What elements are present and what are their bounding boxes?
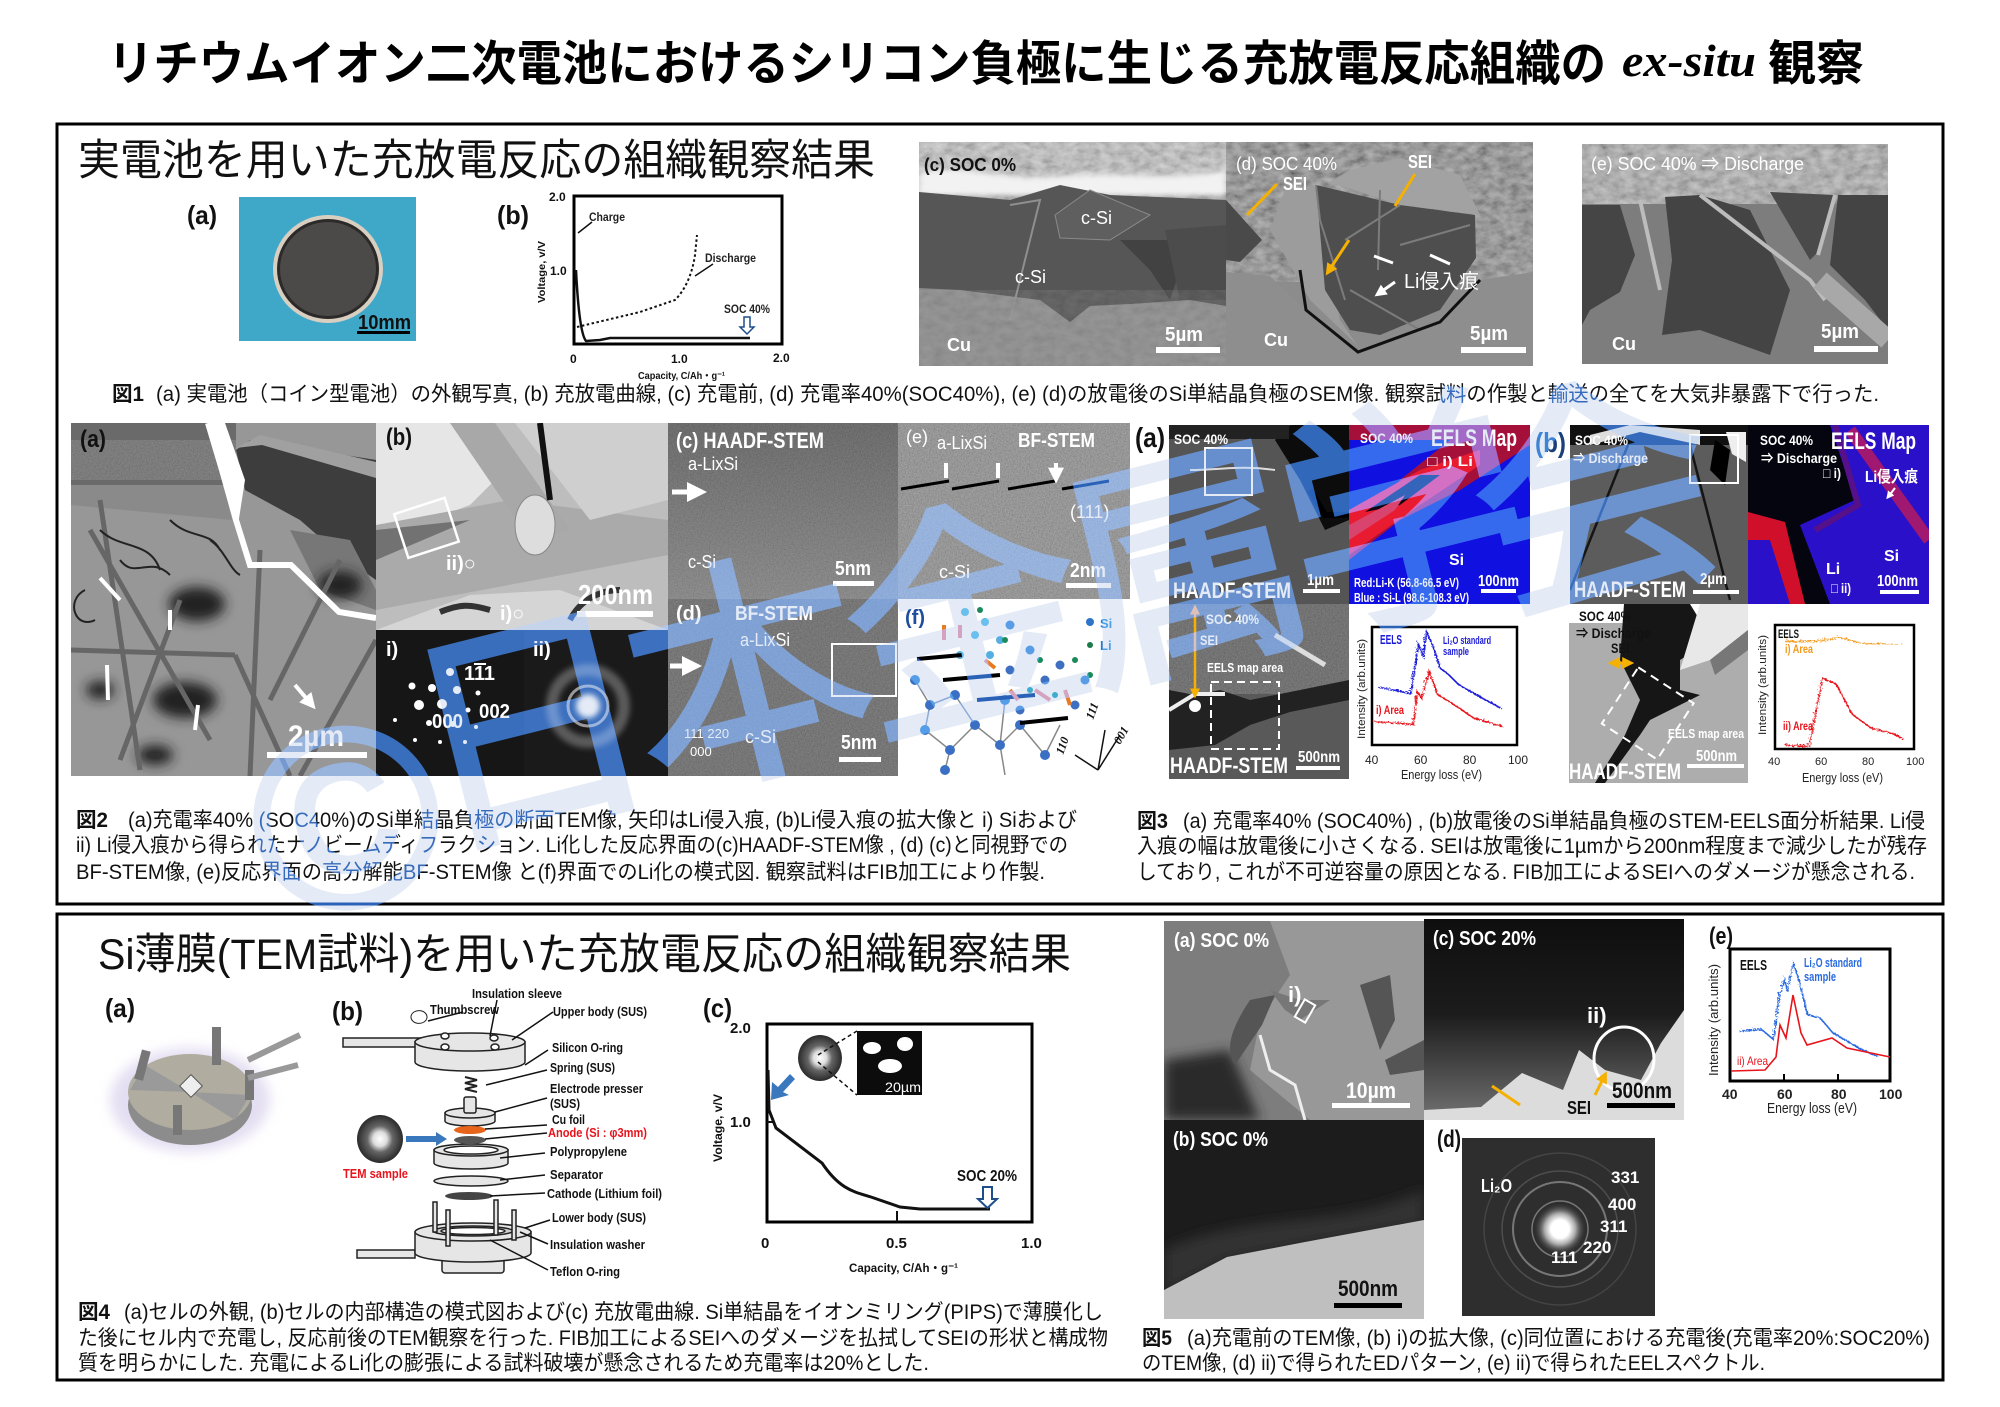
chart: EELS a [1356, 627, 1528, 782]
schematic: cell internal structure: Insulation sleeve [472, 987, 562, 1001]
schematic: cell internal structure: Polypropylene [550, 1145, 627, 1159]
watermark: pale tint: © [220, 658, 472, 980]
caption: figure 5 [1142, 1327, 1930, 1375]
schematic: f lattice model [905, 607, 1132, 775]
schematic: cell internal structure: Electrode presser [550, 1082, 643, 1096]
SEM image: c SOC 0%: Cu [947, 335, 971, 355]
watermark: pale tint: 日 [382, 573, 679, 891]
schematic: cell internal structure: Teflon O-ring [550, 1265, 620, 1279]
STEM image: fig3 a bottom: SEI [1200, 632, 1218, 648]
STEM image: e lattice: BF-STEM [1018, 430, 1095, 452]
EELS map: a: Si [1449, 552, 1464, 569]
schematic: cell internal structure: Silicon O-ring [552, 1041, 623, 1055]
schematic: cell internal structure: Thumbscrew [430, 1003, 499, 1017]
chart: thin-film curve: Capacity, C/Ah・g⁻¹ [849, 1261, 958, 1275]
SEM image: e SOC 40% discharge: Cu [1612, 334, 1636, 354]
chart: charge-discharge curve: 1.0 [550, 264, 567, 278]
TEM image: fig5 c: 500nm [1612, 1078, 1672, 1103]
diffraction: Li2O rings: 331 [1611, 1168, 1639, 1187]
caption: figure 4: た後にセル内で充電し, 反応前後のTEM観察を行った. FIB加工によるSEIへのダメージを払拭してSEIの形状と構成物 [78, 1327, 1108, 1350]
heading: thin film: Si薄膜(TEM試料)を用いた充放電反応の組織観察結果 [98, 931, 1071, 979]
chart: EELS fig5 [1706, 949, 1903, 1117]
STEM image: fig3 b top: HAADF-STEM [1574, 577, 1686, 602]
STEM image: c HAADF: a-LixSi [688, 454, 738, 474]
EELS map: b: Si [1884, 548, 1899, 565]
SEM image: d SOC 40%: SEI [1283, 174, 1307, 194]
chart: charge-discharge curve: Charge [589, 210, 625, 224]
STEM image: fig3 b top: 2µm [1700, 571, 1727, 588]
TEM image: fig2 a [71, 423, 376, 776]
label: fig5 e: (e) [1709, 923, 1733, 950]
watermark: pale tint: 属 [1037, 410, 1334, 728]
watermark: copyright: 日 [382, 573, 679, 891]
EELS map: a: Blue : Si-L (98.6-108.3 eV) [1354, 590, 1469, 605]
TEM image: fig5 b: (b) SOC 0% [1173, 1129, 1268, 1151]
chart: EELS fig5: 80 [1831, 1086, 1847, 1102]
STEM image: e lattice: c-Si [939, 562, 970, 582]
schematic: cell internal structure: Cu foil [552, 1113, 585, 1127]
SEM image: c SOC 0%: (c) SOC 0% [924, 155, 1016, 175]
SEM image: c SOC 0%: c-Si [1081, 208, 1112, 228]
caption: figure 2: 図2 [76, 809, 108, 832]
EELS map: b [1748, 425, 1929, 604]
chart: thin-film curve: 1.0 [1021, 1235, 1042, 1252]
TEM image: fig5 c: ii) [1587, 1003, 1607, 1028]
EELS map: a: Red:Li-K (56.8-66.5 eV) [1354, 575, 1459, 590]
schematic: cell internal structure: Separator [550, 1168, 603, 1182]
chart: EELS b [1757, 625, 1924, 785]
chart: thin-film curve: Voltage, v/V [711, 1094, 725, 1162]
TEM image: fig2 b [376, 423, 668, 630]
diffraction: ii [524, 630, 668, 776]
EELS map: a: SOC 40% [1360, 430, 1413, 446]
SEM image: d SOC 40%: SEI [1408, 152, 1432, 172]
title: リチウムイオン二次電池におけるシリコン負極に生じる充放電反応組織の [108, 38, 1606, 91]
TEM image: fig5 a: (a) SOC 0% [1174, 930, 1269, 952]
title: 観察 [1768, 38, 1864, 91]
STEM image: fig3 b top [1570, 425, 1748, 604]
SEM image: e SOC 40% discharge: 5µm [1821, 321, 1859, 343]
STEM image: c HAADF: (c) HAADF-STEM [676, 428, 824, 453]
TEM image: fig2 a: (a) [80, 426, 106, 453]
EELS map: b: Li [1826, 561, 1840, 578]
STEM image: fig3 a top: HAADF-STEM [1173, 578, 1291, 603]
schematic: cell internal structure: Spring (SUS) [550, 1061, 615, 1075]
SEM image: d SOC 40%: Cu [1264, 330, 1288, 350]
STEM image: d BF: 000 [690, 744, 712, 759]
STEM image: fig3 a top: SOC 40% [1174, 431, 1228, 447]
STEM image: e lattice [898, 423, 1130, 599]
title: ex-situ [1622, 35, 1756, 86]
STEM image: e lattice: 2nm [1070, 560, 1106, 582]
STEM image: fig3 a bottom: HAADF-STEM [1170, 753, 1288, 778]
chart: thin-film curve: 2.0 [730, 1020, 751, 1037]
SEM image: c SOC 0%: 5µm [1165, 324, 1203, 346]
caption: figure 3: 図3 [1137, 810, 1168, 833]
chart: charge-discharge curve: 0 [570, 352, 577, 366]
chart: EELS a: 40 [1365, 753, 1379, 767]
schematic: f lattice model: 110 [1053, 735, 1072, 756]
watermark: pale tint: 本 [600, 518, 898, 837]
schematic: f lattice model: 111 [1083, 701, 1102, 721]
TEM image: fig2 b: i)○ [500, 603, 524, 625]
caption: figure 3: しており, これが不可逆容量の原因となる. FIB加工によるSEIへのダメージが懸念される. [1137, 861, 1915, 884]
watermark: pale tint: 金 [818, 464, 1116, 782]
STEM image: e lattice: a-LixSi [937, 433, 987, 453]
chart: EELS b: EELS [1778, 627, 1799, 641]
STEM image: fig3 b bottom: 500nm [1696, 748, 1737, 765]
watermark: copyright: 属 [1037, 410, 1334, 728]
schematic: f lattice model: Li [1100, 638, 1112, 653]
TEM image: fig5 b [1164, 1120, 1424, 1319]
TEM image: fig5 a: 10µm [1346, 1078, 1396, 1103]
chart: EELS a: 80 [1463, 753, 1477, 767]
EELS map: a: □ i) Li [1427, 453, 1473, 469]
STEM image: d BF: 111 220 [684, 726, 729, 741]
chart: EELS a: Energy loss (eV) [1401, 767, 1482, 782]
schematic: cell internal structure: Upper body (SUS) [553, 1005, 647, 1019]
watermark: copyright [213, 309, 1749, 980]
SEM image: c SOC 0%: c-Si [1015, 267, 1046, 287]
EELS map: a [1349, 425, 1530, 605]
schematic: f lattice model: 001 [1110, 724, 1132, 746]
panel: real-cell observation [57, 124, 1943, 904]
TEM image: fig5 b: 500nm [1338, 1276, 1398, 1301]
watermark: pale tint [213, 309, 1749, 980]
diffraction: ii: ii) [533, 639, 551, 661]
chart: charge-discharge curve: Discharge [705, 251, 756, 265]
watermark: copyright: © [220, 658, 472, 980]
chart: EELS b: 60 [1815, 756, 1827, 768]
chart: EELS fig5: sample [1804, 969, 1836, 984]
chart: EELS b: Intensity (arb.units) [1757, 635, 1769, 735]
chart: EELS a: 60 [1414, 753, 1428, 767]
label: fig4 b: (b) [332, 996, 363, 1026]
chart: charge-discharge curve [537, 190, 790, 382]
chart: EELS a: i) Area [1376, 703, 1404, 717]
schematic: cell internal structure: Cathode (Lithium foil) [547, 1187, 662, 1201]
STEM image: fig3 b bottom: SEI [1611, 640, 1629, 656]
STEM image: fig3 b top: ⇒ Discharge [1573, 450, 1648, 466]
chart: EELS b: 80 [1862, 756, 1874, 768]
chart: EELS fig5: 60 [1777, 1086, 1793, 1102]
caption: figure 2: ii) Li侵入痕から得られたナノビームディフラクション. Li化した反応界面の(c)HAADF-STEM像 , (d) (c)と同視野での [76, 834, 1068, 857]
STEM image: c HAADF [668, 423, 898, 599]
photo: cell exterior [110, 1027, 300, 1152]
chart: EELS a: Li₂O standard [1443, 635, 1491, 647]
caption: figure 4 [78, 1301, 1108, 1375]
STEM image: fig3 a top [1169, 425, 1349, 604]
chart: thin-film curve: 20µm [885, 1079, 921, 1095]
caption: figure 2 [76, 809, 1077, 884]
label: fig3 b: (b) [1535, 427, 1566, 458]
TEM image: fig5 c: SEI [1567, 1098, 1591, 1118]
caption: figure 4: 図4 [78, 1301, 110, 1324]
schematic: cell internal structure: TEM sample [343, 1167, 408, 1181]
chart: charge-discharge curve: Voltage, v/V [537, 241, 548, 303]
caption: figure 2: (a)充電率40% (SOC40%)のSi単結晶負極の断面TEM像, 矢印はLi侵入痕, (b)Li侵入痕の拡大像と i) Siおよび [128, 809, 1077, 832]
diffraction: i: 111 [464, 663, 495, 685]
diffraction: Li2O rings: 111 [1551, 1248, 1578, 1267]
diffraction: Li2O rings: 220 [1583, 1238, 1611, 1257]
chart: thin-film curve: SOC 20% [957, 1168, 1017, 1185]
chart: EELS a: 100 [1508, 753, 1528, 767]
STEM image: e lattice: (111) [1070, 502, 1109, 522]
caption: figure 4: (a)セルの外観, (b)セルの内部構造の模式図および(c) 充放電曲線. Si単結晶をイオンミリング(PIPS)で薄膜化し [124, 1301, 1103, 1324]
chart: EELS b: Energy loss (eV) [1802, 770, 1883, 785]
STEM image: d BF: c-Si [745, 727, 776, 747]
schematic: cell internal structure: Insulation washer [550, 1238, 645, 1252]
caption: figure 3: (a) 充電率40% (SOC40%) , (b)放電後のSi単結晶負極のSTEM-EELS面分析結果. Li侵 [1183, 810, 1925, 833]
watermark: copyright: 本 [600, 518, 898, 837]
STEM image: c HAADF: c-Si [688, 552, 716, 572]
diffraction: Li2O rings [1462, 1138, 1655, 1316]
chart: EELS fig5: 40 [1722, 1086, 1738, 1102]
STEM image: d BF [668, 599, 898, 776]
schematic: cell internal structure: Anode (Si : φ3mm) [548, 1126, 647, 1140]
diffraction: i: i) [386, 639, 398, 661]
STEM image: d BF: 5nm [841, 732, 877, 754]
caption: figure 4: 質を明らかにした. 充電によるLi化の膨張による試料破壊が懸念されるため充電率は20%とした. [78, 1352, 929, 1375]
EELS map: b: 100nm [1877, 573, 1918, 590]
TEM image: fig2 b: ii)○ [446, 553, 476, 575]
TEM image: fig5 a: i) [1288, 982, 1301, 1007]
watermark: pale tint: 学 [1256, 360, 1554, 678]
caption: figure 3 [1137, 810, 1927, 884]
schematic: f lattice model: (f) [905, 607, 925, 629]
schematic: cell internal structure [343, 987, 662, 1279]
diffraction: i: 000 [432, 711, 463, 733]
chart: thin-film curve [711, 1020, 1042, 1275]
STEM image: fig3 a bottom: EELS map area [1207, 660, 1284, 675]
chart: thin-film curve: 0 [761, 1235, 769, 1252]
STEM image: fig3 a bottom: SOC 40% [1206, 611, 1259, 627]
chart: EELS fig5: Intensity (arb.units) [1706, 964, 1721, 1076]
label: fig5 d: (d) [1437, 1126, 1461, 1153]
chart: EELS b: i) Area [1785, 642, 1813, 656]
TEM image: fig5 c: (c) SOC 20% [1433, 928, 1536, 950]
diffraction: i: 002 [479, 701, 510, 723]
chart: EELS b: 40 [1768, 756, 1780, 768]
STEM image: fig3 b bottom [1569, 604, 1748, 784]
watermark: copyright: 学 [1256, 360, 1554, 678]
chart: EELS fig5: EELS [1740, 957, 1767, 974]
caption: figure 5: (a)充電前のTEM像, (b) i)の拡大像, (c)同位置における充電後(充電率20%:SOC20%) [1187, 1327, 1930, 1350]
STEM image: c HAADF: 5nm [835, 558, 871, 580]
STEM image: fig3 b bottom: SOC 40% [1579, 608, 1631, 624]
chart: charge-discharge curve: 2.0 [773, 351, 790, 365]
STEM image: d BF: a-LixSi [740, 630, 790, 650]
chart: EELS fig5: Li₂O standard [1804, 955, 1862, 970]
SEM image: d SOC 40%: 5µm [1470, 323, 1508, 345]
label: fig1 a: (a) [187, 200, 217, 230]
STEM image: fig3 b bottom: ⇒ Discharge [1576, 625, 1651, 641]
EELS map: b: Li侵入痕 [1865, 468, 1918, 486]
EELS map: b: □ i) [1823, 465, 1841, 481]
diffraction: i [376, 630, 524, 776]
caption: figure 5: のTEM像, (d) ii)で得られたEDパターン, (e) ii)で得られたEELスペクトル. [1142, 1352, 1765, 1375]
diffraction: Li2O rings: Li₂O [1481, 1176, 1512, 1196]
chart: EELS a: Intensity (arb.units) [1356, 639, 1368, 739]
chart: thin-film curve: 0.5 [886, 1235, 907, 1252]
SEM image: d SOC 40%: (d) SOC 40% [1236, 154, 1337, 174]
chart: EELS b: ii) Area [1783, 719, 1813, 733]
STEM image: fig3 a bottom: 500nm [1298, 749, 1340, 766]
SEM image: e SOC 40% discharge [1582, 144, 1888, 364]
chart: charge-discharge curve: SOC 40% [724, 302, 770, 316]
STEM image: fig3 b top: SOC 40% [1575, 432, 1628, 448]
EELS map: b: □ ii) [1831, 580, 1851, 596]
diffraction: Li2O rings: 400 [1608, 1195, 1636, 1214]
label: fig4 a: (a) [105, 993, 135, 1023]
TEM image: fig2 b: (b) [386, 424, 412, 451]
EELS map: b: SOC 40% [1760, 432, 1813, 448]
chart: charge-discharge curve: 1.0 [671, 352, 688, 366]
TEM image: fig2 b: 200nm [578, 579, 653, 610]
heading: real cell: 実電池を用いた充放電反応の組織観察結果 [78, 137, 875, 185]
watermark: pale tint: 会 [1447, 341, 1745, 659]
caption: figure 2: BF-STEM像, (e)反応界面の高分解能BF-STEM像 と(f)界面でのLi化の模式図. 観察試料はFIB加工により作製. [76, 861, 1045, 884]
label: fig3 a: (a) [1135, 422, 1165, 453]
diffraction: Li2O rings: 311 [1600, 1217, 1627, 1236]
SEM image: e SOC 40% discharge: (e) SOC 40% ⇒ Discharge [1591, 154, 1804, 174]
STEM image: e lattice: (e) [906, 427, 928, 447]
caption: figure 5: 図5 [1142, 1327, 1172, 1350]
chart: charge-discharge curve: Capacity, C/Ah・g⁻¹ [638, 371, 726, 382]
caption: figure 1: 図1 [112, 383, 144, 406]
TEM image: fig5 a [1164, 921, 1424, 1120]
STEM image: d BF: BF-STEM [735, 603, 813, 625]
STEM image: d BF: (d) [676, 603, 702, 625]
label: fig1 b: (b) [497, 200, 529, 230]
photo: coin cell [239, 197, 416, 341]
caption: figure 3: 入痕の幅は放電後に小さくなる. SEIは放電後に1µmから200nm程度まで減少したが残存 [1137, 835, 1927, 858]
chart: EELS fig5: Energy loss (eV) [1767, 1100, 1857, 1117]
SEM image: d SOC 40% [1226, 142, 1533, 366]
chart: EELS a: sample [1443, 646, 1469, 658]
STEM image: fig3 a top: 1µm [1307, 572, 1334, 589]
watermark: copyright: 金 [818, 464, 1116, 782]
schematic: f lattice model: Si [1100, 616, 1112, 631]
EELS map: b: ⇒ Discharge [1761, 450, 1837, 466]
STEM image: fig3 b bottom: HAADF-STEM [1569, 759, 1681, 784]
TEM image: fig2 a: 2µm [288, 720, 344, 753]
chart: EELS a: EELS [1380, 632, 1402, 647]
watermark: copyright: 会 [1447, 341, 1745, 659]
SEM image: c SOC 0% [919, 142, 1226, 366]
label: fig4 c: (c) [703, 993, 732, 1023]
photo: coin cell: 10mm [358, 312, 411, 334]
caption: figure 1: (a) 実電池（コイン型電池）の外観写真, (b) 充放電曲線, (c) 充電前, (d) 充電率40%(SOC40%), (e) (d)の放電後のSi単結晶負極のSEM像. 観察試料の作製と輸送の全てを大気非暴露下で行った. [156, 383, 1879, 406]
TEM image: fig5 c [1424, 919, 1684, 1120]
STEM image: fig3 a bottom [1169, 604, 1349, 779]
schematic: cell internal structure: Lower body (SUS) [552, 1211, 646, 1225]
chart: EELS b: 100 [1906, 756, 1924, 768]
schematic: cell internal structure: (SUS) [550, 1097, 580, 1111]
EELS map: a: 100nm [1478, 573, 1519, 590]
chart: EELS fig5: 100 [1879, 1086, 1903, 1102]
SEM image: d SOC 40%: Li侵入痕 [1404, 270, 1479, 293]
chart: charge-discharge curve: 2.0 [549, 190, 566, 204]
chart: EELS fig5: ii) Area [1737, 1054, 1768, 1068]
chart: thin-film curve: 1.0 [730, 1114, 751, 1131]
panel: Si thin film observation [57, 914, 1943, 1380]
